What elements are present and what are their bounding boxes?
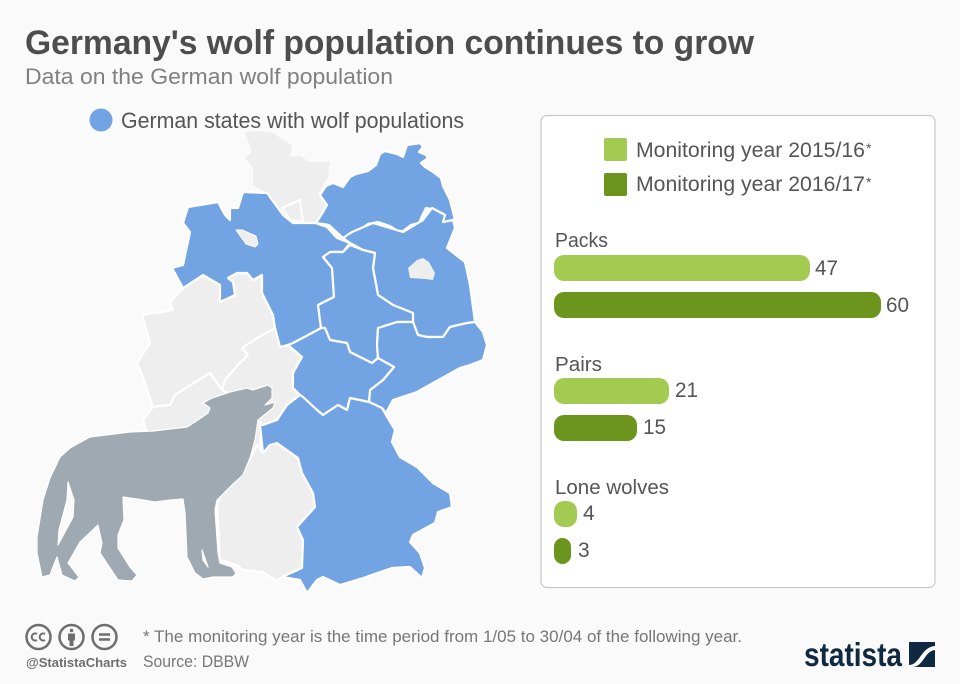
map legend: German states with wolf populations	[121, 108, 464, 133]
legend: monitoring year 2015/16: *	[866, 140, 872, 156]
legend: monitoring year 2016/17: *	[866, 174, 872, 190]
footnote: * The monitoring year is the time period from 1/05 to 30/04 of the following year.	[143, 627, 742, 646]
map of Germany	[137, 131, 487, 593]
icons: creative commons licence	[26, 625, 116, 649]
state: Lower Saxony	[172, 192, 350, 347]
state: Brandenburg	[343, 208, 475, 337]
title: Germany's wolf population continues to grow	[25, 24, 755, 62]
state: Thuringia	[288, 328, 394, 415]
state: Bremen	[236, 230, 258, 247]
bar group: lone wolves	[554, 477, 669, 564]
source: Source: DBBW	[143, 652, 249, 671]
state: Bavaria	[260, 395, 452, 593]
state: North Rhine-Westphalia and Rhineland	[137, 273, 275, 407]
icon: wolf silhouette	[37, 385, 275, 581]
attribution handle: @StatistaCharts	[26, 656, 127, 670]
bar group: packs: 60	[886, 294, 909, 317]
bar group: pairs	[554, 354, 698, 441]
legend: monitoring year 2015/16: Monitoring year 2015/16	[636, 139, 865, 162]
bar group: packs: 47	[815, 257, 838, 280]
bar group: packs	[554, 230, 909, 318]
bar group: lone wolves: 4	[583, 502, 595, 525]
bar group: lone wolves: 3	[578, 539, 590, 562]
bar group: pairs: 15	[643, 416, 666, 439]
state: Saxony-Anhalt	[318, 245, 413, 363]
bar group: pairs: 21	[675, 379, 698, 402]
state: Schleswig-Holstein	[245, 131, 330, 223]
statista logo: statista	[804, 636, 903, 673]
legend: monitoring year 2016/17: Monitoring year 2016/17	[636, 173, 865, 196]
bar group: packs: Packs	[555, 230, 608, 252]
state: Rhineland-Palatinate and Saarland	[143, 373, 262, 463]
subtitle: Data on the German wolf population	[25, 64, 393, 89]
state: Berlin	[408, 258, 435, 280]
bar group: pairs: Pairs	[555, 354, 602, 376]
panel: monitoring data	[541, 116, 935, 588]
state: Mecklenburg-Vorpommern	[316, 143, 455, 240]
state: Hamburg	[282, 200, 303, 222]
state: Baden-Wurttemberg	[217, 443, 315, 581]
state: Saxony	[369, 322, 487, 413]
state: Hesse	[222, 328, 302, 425]
bar group: lone wolves: Lone wolves	[555, 477, 669, 499]
